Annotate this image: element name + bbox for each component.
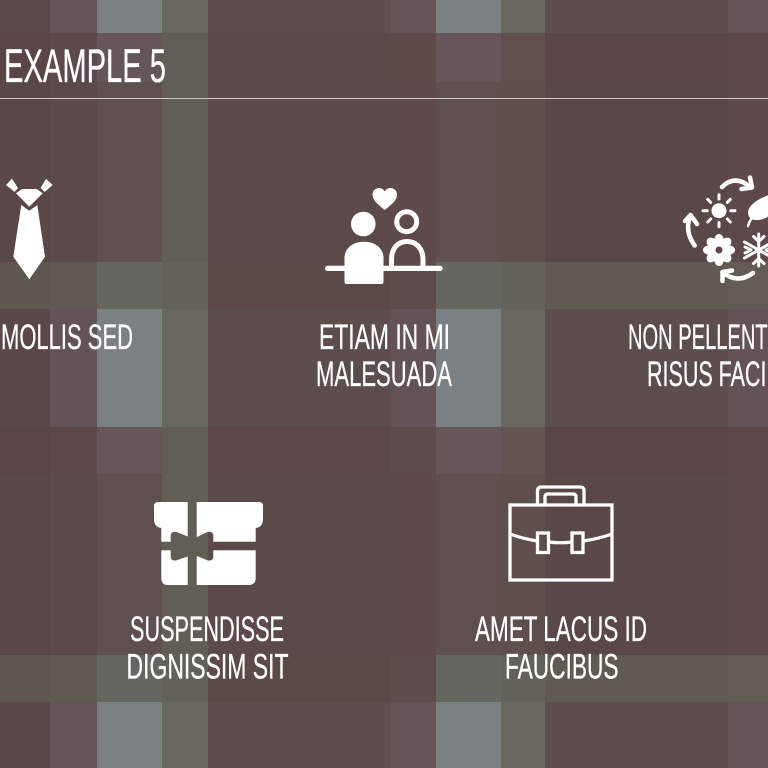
label: amet lacus id faucibus: FAUCIBUS	[505, 648, 618, 686]
icon: seasons cycle	[685, 178, 768, 281]
panel: suspendisse dignissim sit	[128, 502, 288, 679]
label: amet lacus id faucibus	[475, 610, 647, 686]
label: mollis sed: MOLLIS SED	[1, 318, 133, 357]
icon: briefcase	[510, 487, 612, 580]
label: suspendisse dignissim sit: DIGNISSIM SIT	[126, 648, 288, 686]
panel: amet lacus id faucibus	[475, 487, 647, 686]
label: suspendisse dignissim sit	[126, 610, 288, 686]
panel: mollis sed	[1, 179, 133, 357]
label: etiam in mi malesuada: ETIAM IN MI	[319, 318, 450, 357]
icon: couple at table with heart	[325, 188, 443, 284]
label: suspendisse dignissim sit: SUSPENDISSE	[130, 610, 284, 649]
panel: etiam in mi malesuada	[316, 188, 452, 394]
title: EXAMPLE 5	[4, 39, 166, 92]
icon: gift box	[154, 502, 263, 585]
label: etiam in mi malesuada	[316, 318, 452, 394]
label: etiam in mi malesuada: MALESUADA	[316, 355, 452, 394]
panel: non pellentesque risus facilisis	[628, 178, 768, 394]
label: amet lacus id faucibus: AMET LACUS ID	[475, 610, 647, 649]
label: non pellentesque risus facilisis	[628, 318, 768, 394]
icon: necktie	[6, 179, 53, 279]
